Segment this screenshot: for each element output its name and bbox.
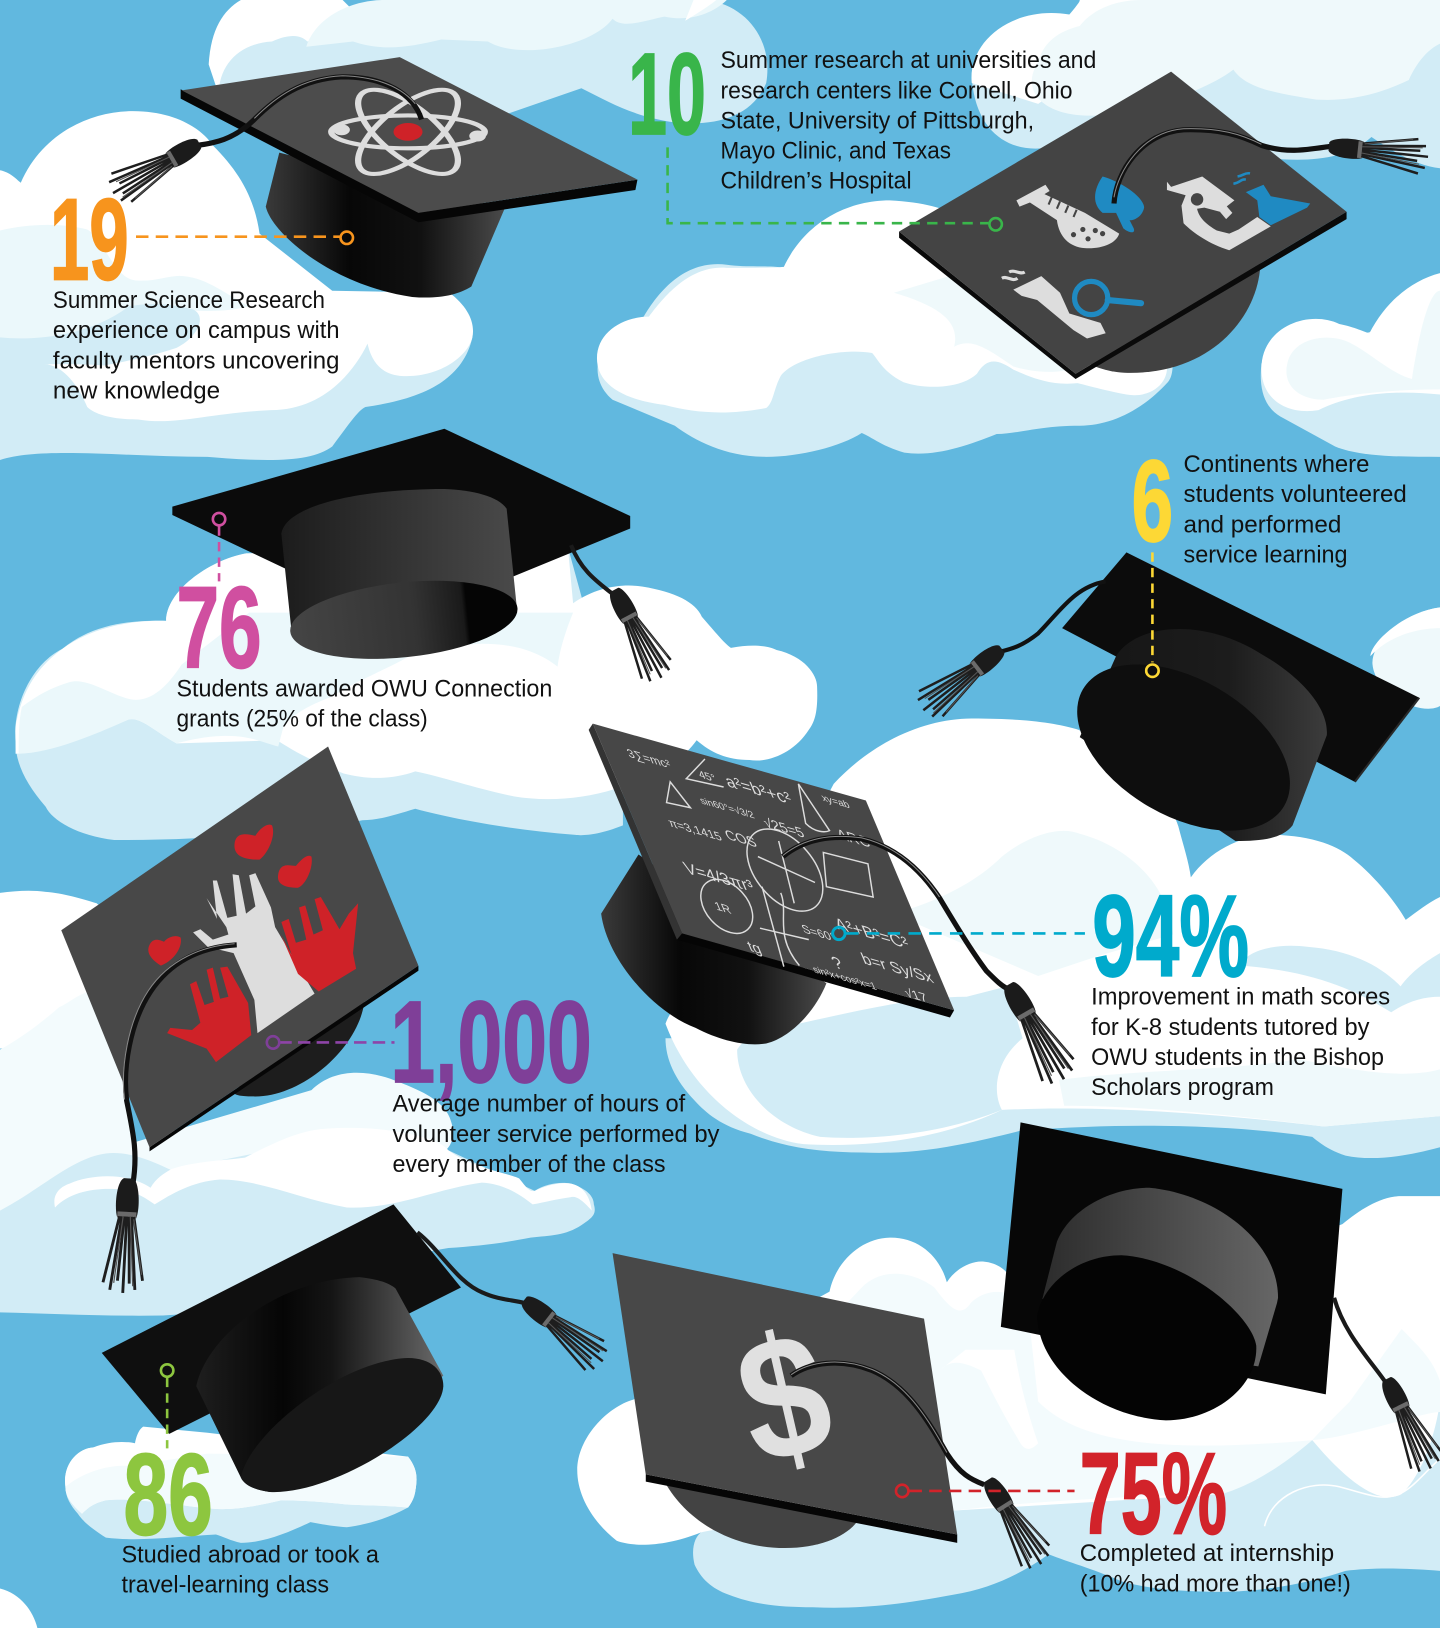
description: 75%: Completed at internship — [1080, 1540, 1334, 1567]
description: 76: Students awarded OWU Connection — [176, 675, 552, 702]
tassel — [599, 582, 676, 686]
formulas: sin60°=√3/2 — [698, 795, 757, 821]
number: 76: 76 — [176, 563, 262, 693]
formulas: √17 — [902, 984, 930, 1006]
description: 6 — [1184, 451, 1407, 568]
description: 94% — [1091, 984, 1390, 1101]
connector: cyan — [833, 927, 1085, 940]
formulas: COS — [722, 827, 760, 851]
tassel — [992, 975, 1080, 1089]
description: 86: Studied abroad or took a — [121, 1541, 380, 1568]
connector: yellow — [1146, 552, 1159, 677]
description: 94%: for K-8 students tutored by — [1091, 1014, 1369, 1041]
description: 10: State, University of Pittsburgh, — [721, 107, 1034, 134]
connector: pink — [213, 513, 225, 581]
description: 19: Summer Science Research — [53, 287, 325, 314]
connector: purple — [267, 1036, 395, 1049]
formulas: 3∑=mc² — [624, 746, 674, 772]
cap: tilted side view — [102, 1204, 613, 1492]
cap: tilted underside — [912, 552, 1419, 865]
description: 10: Mayo Clinic, and Texas — [721, 138, 951, 165]
number: 75%: 75% — [1080, 1429, 1227, 1559]
description: 1,000: volunteer service performed by — [392, 1121, 720, 1148]
formulas: tg — [745, 938, 764, 958]
tassel — [513, 1287, 613, 1375]
description: 6: students volunteered — [1184, 481, 1407, 508]
formulas: sin²x+cos²x=1 — [811, 964, 879, 993]
icon: microscope and flask — [1167, 173, 1310, 250]
cap: atom — [104, 57, 637, 298]
connector: lime — [161, 1364, 173, 1448]
description: 19: new knowledge — [53, 377, 220, 404]
cap: overhead view — [1001, 1122, 1440, 1476]
formulas: 1R — [712, 898, 733, 917]
formulas — [620, 736, 947, 1012]
description: 1,000: every member of the class — [392, 1151, 666, 1178]
description: 86: travel-learning class — [121, 1571, 329, 1598]
description: 1,000 — [392, 1091, 720, 1178]
number: 19: 19 — [50, 174, 129, 304]
formulas: ARC — [834, 826, 873, 852]
icon: test tube and magnifier — [1002, 271, 1141, 338]
formulas: b=r Sy/Sx — [858, 949, 937, 987]
description: 94%: Improvement in math scores — [1091, 984, 1390, 1011]
panel: 19 summer science research — [50, 57, 637, 404]
formulas: ? — [828, 953, 846, 974]
panel: 10 summer research elsewhere — [628, 29, 1430, 379]
connector: green — [668, 147, 1002, 230]
description: 10 — [721, 47, 1096, 195]
description: 10: Children’s Hospital — [721, 168, 912, 195]
tassel — [104, 128, 208, 208]
connector: orange — [136, 232, 353, 244]
formulas: S=60° — [799, 921, 838, 945]
description: 75%: (10% had more than one!) — [1080, 1570, 1351, 1597]
description: 76 — [176, 675, 552, 732]
description: 94%: Scholars program — [1091, 1074, 1274, 1101]
tassel — [102, 1177, 148, 1294]
tassel — [1371, 1372, 1440, 1476]
number: 6: 6 — [1132, 436, 1173, 566]
number: 86: 86 — [124, 1430, 213, 1560]
description: 6: Continents where — [1184, 451, 1369, 478]
panel: 94% math scores — [589, 724, 1390, 1101]
connector: red — [896, 1485, 1075, 1497]
formulas: V=4/3πr³ — [680, 858, 757, 896]
cap: dollar sign — [613, 1253, 1055, 1573]
icon: white hand — [193, 873, 315, 1033]
formulas: xy=ab — [820, 792, 852, 811]
cap: research icons — [899, 72, 1430, 379]
icon: dollar: $ — [720, 1292, 848, 1502]
cap: math formulas — [589, 724, 1080, 1089]
tassel — [973, 1471, 1055, 1573]
formulas: √25=5 — [761, 815, 807, 842]
description: 19: experience on campus with — [53, 317, 339, 344]
formulas: π=3,1415 — [666, 815, 724, 844]
description: 10: Summer research at universities and — [721, 47, 1096, 74]
description: 94%: OWU students in the Bishop — [1091, 1044, 1384, 1071]
tassel — [912, 635, 1012, 723]
description: 6: service learning — [1184, 541, 1348, 568]
panel: 75% internship — [613, 1253, 1351, 1597]
number: 94%: 94% — [1092, 871, 1249, 1001]
panel: 76 connection grants — [172, 429, 676, 732]
icon: hearts — [148, 825, 312, 966]
cap: underside view — [172, 429, 676, 686]
formulas: 45° — [696, 768, 718, 785]
description: 19: faculty mentors uncovering — [53, 347, 339, 374]
icon: flask with leaf — [1016, 177, 1144, 248]
description: 76: grants (25% of the class) — [176, 705, 428, 732]
cap: hands and hearts — [61, 747, 418, 1294]
description: 75% — [1080, 1540, 1351, 1597]
number: 10: 10 — [628, 29, 706, 159]
panel: 86 study abroad — [102, 1204, 613, 1598]
description: 6: and performed — [1184, 511, 1341, 538]
icon: red hand left — [167, 967, 251, 1062]
description: 19 — [53, 287, 339, 404]
tassel — [1327, 130, 1430, 174]
number: 1,000: 1,000 — [390, 977, 592, 1107]
panel: 6 continents — [912, 436, 1419, 865]
description: 1,000: Average number of hours of — [392, 1091, 686, 1118]
panel: 1,000 volunteer hours — [61, 747, 720, 1294]
description: 86 — [121, 1541, 380, 1598]
icon: atom — [331, 80, 486, 184]
formulas: a²=b²+c² — [722, 771, 795, 808]
icon: red hand right — [280, 897, 358, 992]
description: 10: research centers like Cornell, Ohio — [721, 77, 1072, 104]
formulas: A²+B²=C² — [831, 914, 912, 953]
